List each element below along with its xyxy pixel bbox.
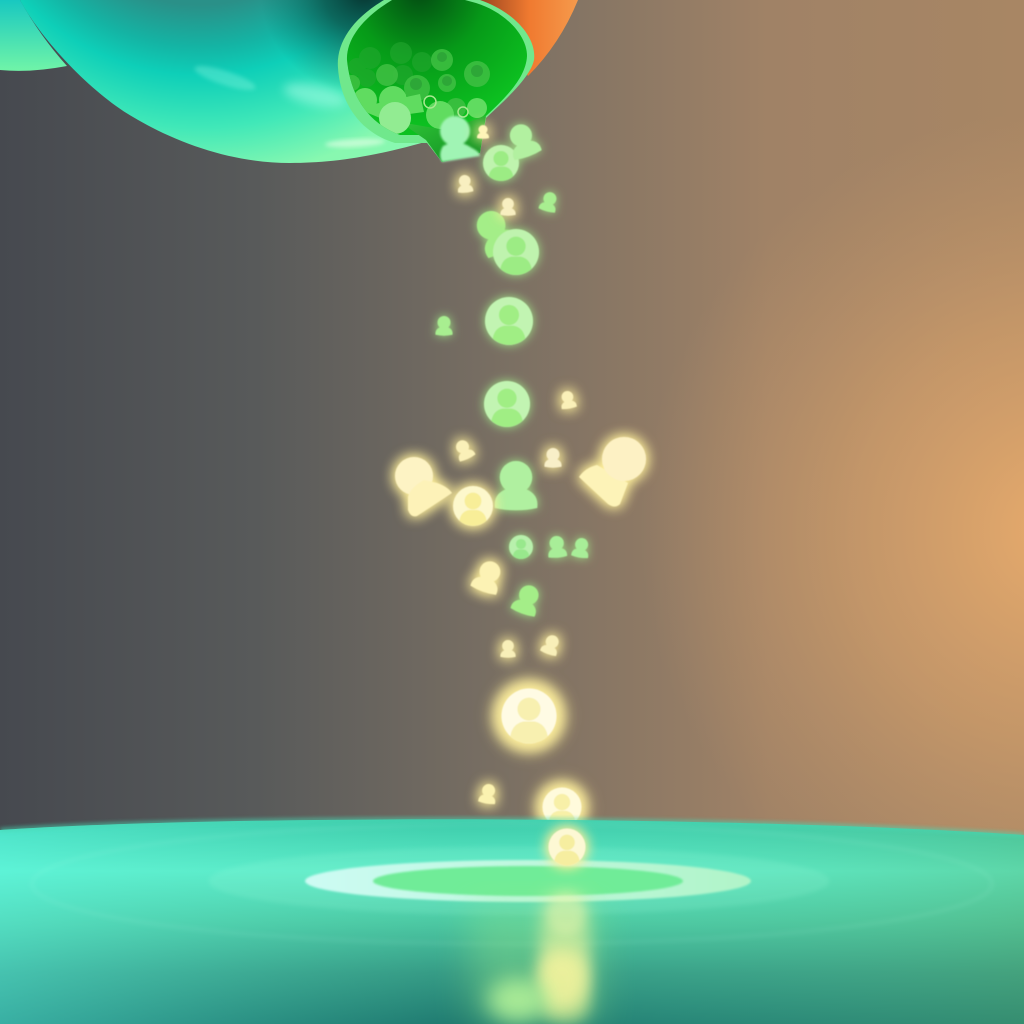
green person 3 — [468, 204, 522, 260]
small green person row right — [571, 537, 591, 559]
large tilted bowl — [20, 0, 578, 163]
spout — [400, 116, 486, 162]
small green person row left — [547, 535, 567, 558]
ripple ring — [305, 860, 751, 902]
yellow bubble person — [453, 486, 493, 526]
bowl interior — [347, 0, 527, 135]
pool soft edge — [0, 819, 1024, 835]
pool disc — [0, 819, 1024, 1024]
small teal bowl at top-left — [0, 0, 67, 71]
small yellow people lower — [478, 633, 562, 805]
glowing yellow people — [395, 125, 646, 833]
bowl opening rim — [338, 0, 534, 162]
small yellow people near the top — [457, 125, 516, 216]
large yellow person right — [579, 437, 646, 506]
ripple centre — [373, 866, 683, 896]
bowl outer: dark shading near the opening — [20, 0, 432, 163]
bowl outer: teal body — [20, 0, 432, 163]
light reflection in the pool — [470, 890, 600, 1024]
small green person 7 — [435, 316, 453, 336]
green person 2 — [503, 120, 542, 161]
outer ripples — [209, 847, 829, 915]
green person 9 — [495, 461, 537, 510]
green bubble person 4 — [493, 229, 539, 275]
green bubble person 1 — [483, 145, 519, 181]
yellow person — [470, 557, 506, 596]
stream of green people — [435, 120, 591, 618]
large yellow person left — [395, 457, 452, 516]
glowing bubble person above pool — [536, 781, 588, 833]
bowl highlights — [192, 61, 385, 149]
green bubble person 8 — [484, 381, 530, 427]
small yellow people middle — [452, 390, 577, 468]
people inside the bowl — [344, 42, 490, 134]
green bubble person 6 — [485, 297, 533, 345]
small green bubble — [509, 535, 533, 559]
bowl outer: orange rim side — [470, 0, 578, 76]
person at the spout — [440, 116, 480, 162]
green person 10 — [510, 582, 544, 618]
glowing bubble person — [493, 680, 565, 752]
small green person 5 — [538, 190, 560, 214]
glowing bubble person touching the pool — [548, 828, 586, 866]
